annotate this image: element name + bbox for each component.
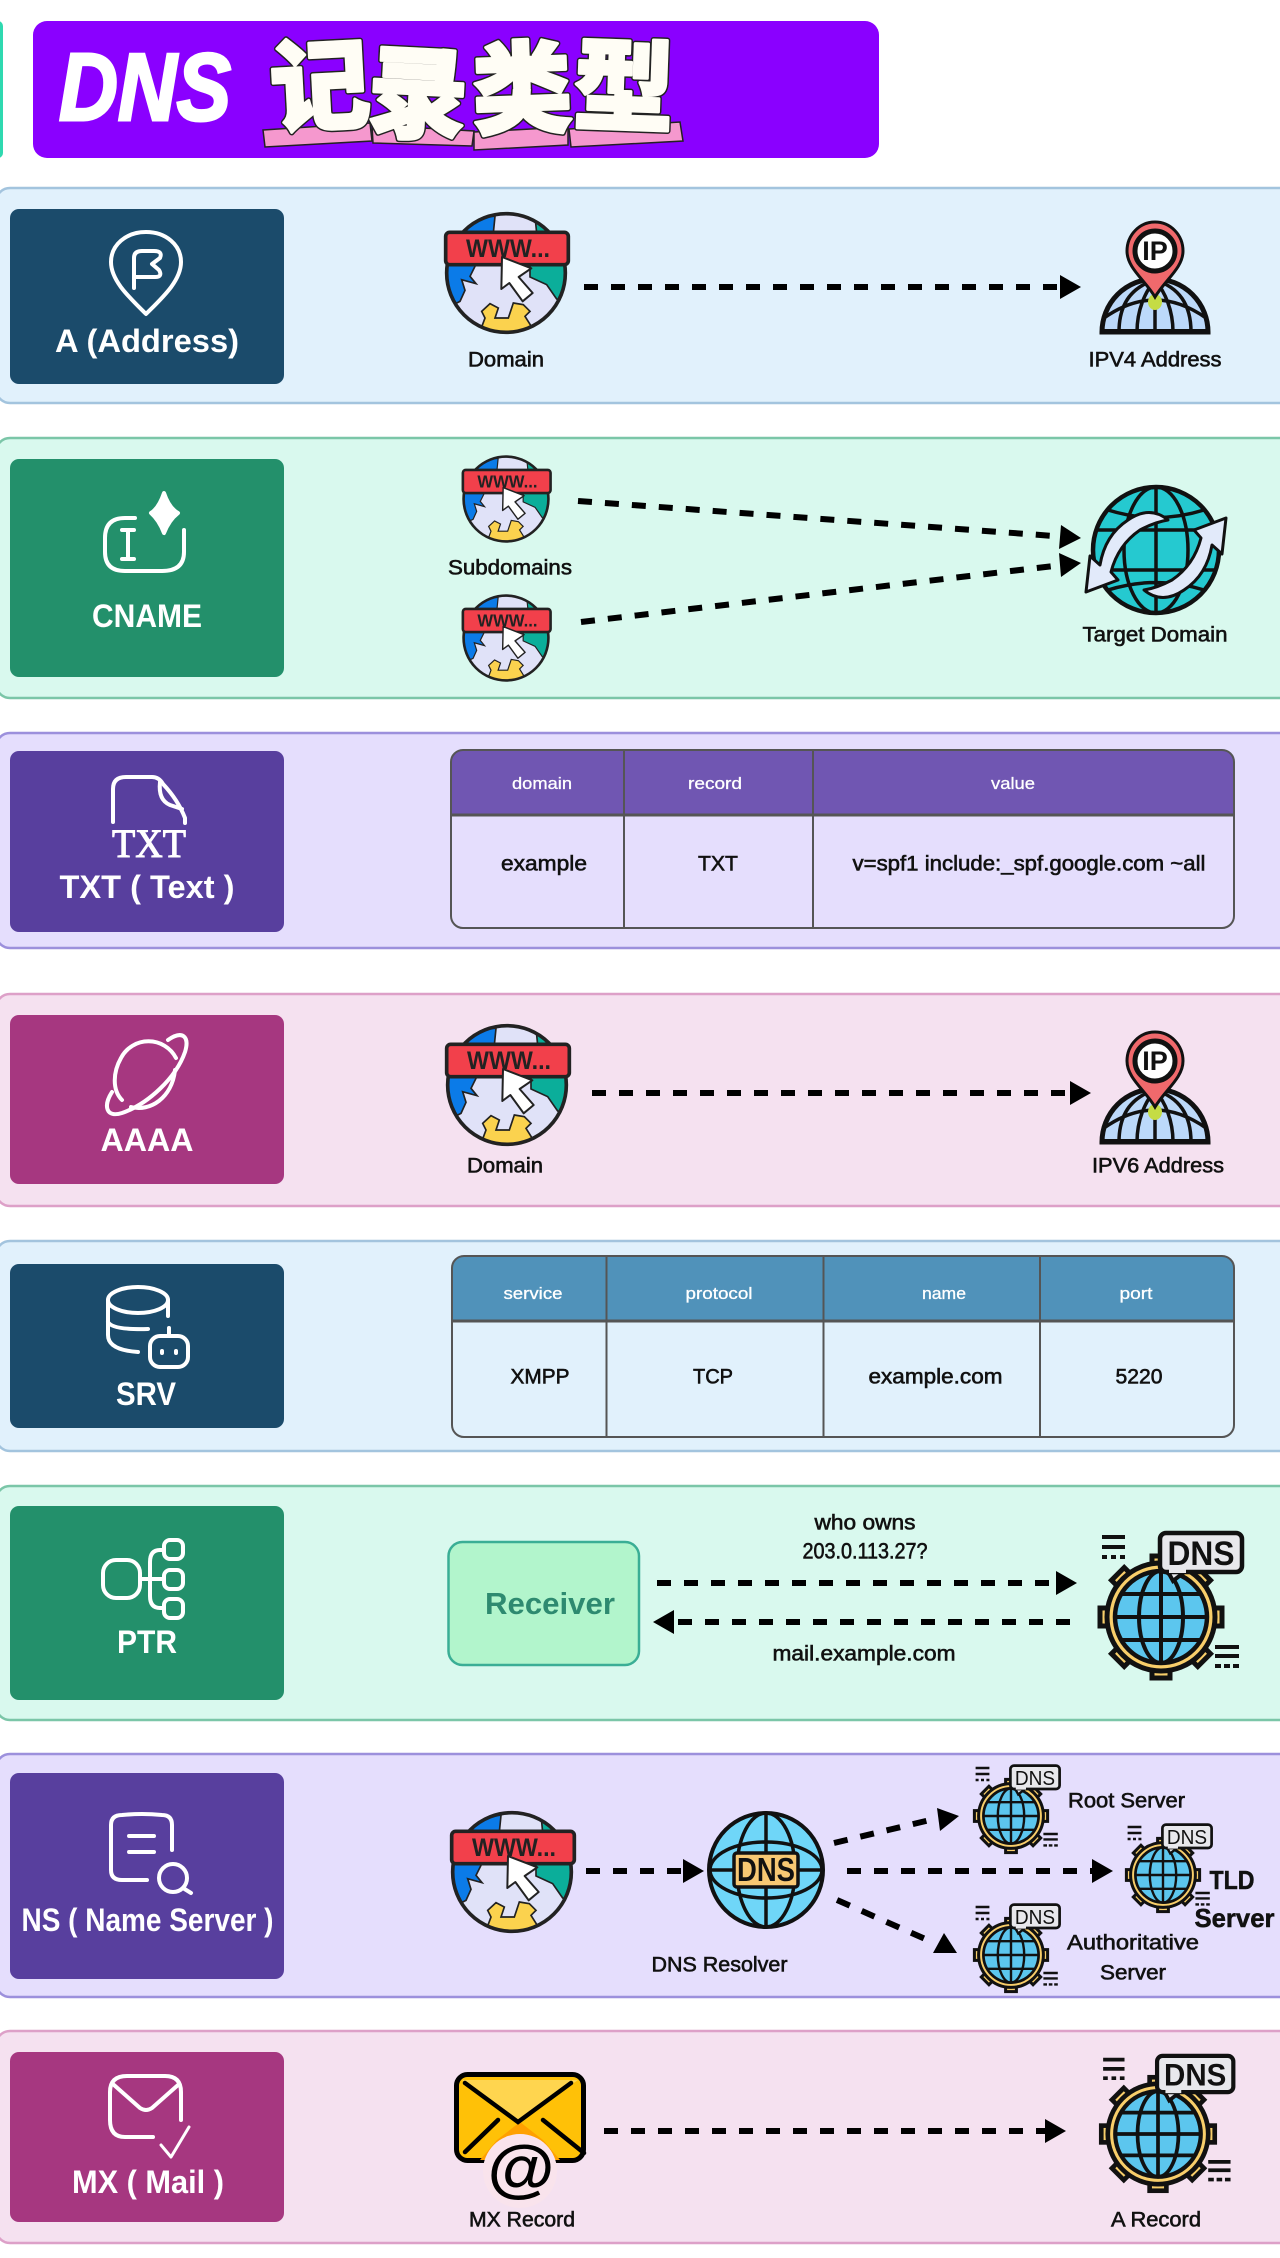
title: 记录类型: 记 [267, 29, 373, 147]
icon: root server: DNS [1015, 1768, 1055, 1790]
table: TXT record: value [991, 774, 1035, 793]
table: SRV record: service [504, 1284, 562, 1303]
table: TXT record: example [501, 852, 587, 875]
arrow: client to resolver [586, 1859, 704, 1883]
icon: subdomain globe 2 [459, 596, 552, 686]
icon: location pin with beta [111, 232, 181, 314]
title: 记录类型: 记 [267, 29, 373, 147]
icon: mail with check [110, 2076, 189, 2157]
text: who owns query [802, 1511, 928, 1564]
icon: subdomain globe 2: WWW... [477, 611, 537, 631]
icon: tree nodes [103, 1540, 183, 1618]
icon: TXT file: TXT [112, 821, 186, 866]
icon: DNS server gear globe [1100, 1533, 1242, 1678]
label: PTR: PTR [117, 1624, 177, 1660]
label: PTR [10, 1506, 284, 1700]
panel: A record [0, 188, 1280, 403]
icon: subdomain globe 1 [459, 457, 552, 547]
icon: IP pin on globe [1100, 222, 1210, 334]
arrow: resolver to authoritative [837, 1900, 957, 1953]
icon: domain globe: WWW... [467, 1047, 551, 1075]
icon: envelope with at sign [456, 2074, 584, 2208]
text: A Record: A Record [1111, 2208, 1201, 2231]
table: SRV record: 5220 [1116, 1365, 1162, 1388]
icon: DNS resolver globe: DNS [737, 1851, 795, 1888]
icon: TLD server [1126, 1825, 1212, 1912]
box: Receiver [448, 1542, 639, 1665]
text: TLD Server: Server [1194, 1903, 1274, 1933]
arrow: MX to A record [604, 2119, 1066, 2143]
panel: AAAA record [0, 994, 1280, 1206]
text: Authoritative Server: Authoritative [1067, 1931, 1199, 1954]
table: TXT record: v=spf1 include:_spf.google.com ~all [852, 852, 1206, 875]
icon: document search [111, 1814, 191, 1893]
title: 记录类型: 型 [572, 31, 676, 147]
icon: planet [107, 1035, 186, 1114]
label: CNAME [10, 459, 284, 677]
text: who owns query: 203.0.113.27? [802, 1539, 928, 1564]
label: MX (Mail): MX ( Mail ) [72, 2164, 224, 2200]
icon: IP pin on globe [1100, 1032, 1210, 1144]
icon: authoritative server: DNS [1015, 1907, 1055, 1929]
arrow: resolver to root [834, 1808, 959, 1843]
icon: IP pin on globe: IP [1142, 236, 1168, 266]
table: TXT record: record [688, 774, 742, 793]
table: TXT record: domain [512, 774, 572, 793]
panel: SRV record [0, 1241, 1280, 1451]
table: SRV record: port [1120, 1284, 1153, 1303]
icon: domain globe: WWW... [466, 235, 550, 263]
title banner [0, 21, 879, 158]
table: SRV record: XMPP [510, 1365, 570, 1388]
icon: TLD server: DNS [1167, 1827, 1207, 1849]
label: A (Address) [10, 209, 284, 384]
icon: client globe [446, 1813, 576, 1939]
text: Domain: Domain [468, 348, 544, 371]
text: Root Server: Root Server [1068, 1789, 1185, 1812]
table: TXT record [451, 750, 1234, 928]
panel: PTR record [0, 1486, 1280, 1720]
label: A (Address): A (Address) [55, 323, 239, 359]
arrow: domain to IPv6 [592, 1081, 1091, 1105]
icon: DNS resolver globe [709, 1813, 823, 1927]
text: Authoritative Server: Server [1100, 1961, 1166, 1984]
table: SRV record: name [922, 1284, 966, 1303]
icon: DNS server gear globe [1101, 2056, 1233, 2191]
label: AAAA: AAAA [100, 1122, 194, 1158]
icon: client globe: WWW... [472, 1834, 556, 1862]
arrow: domain to IPv4 [584, 275, 1081, 299]
arrow: receiver to DNS [657, 1571, 1077, 1595]
label: TXT (Text): TXT ( Text ) [60, 869, 234, 905]
label: MX (Mail) [10, 2052, 284, 2222]
panel: MX record [0, 2031, 1280, 2243]
icon: root server [974, 1766, 1060, 1853]
text: DNS Resolver: DNS Resolver [652, 1953, 788, 1976]
arrow: DNS to receiver [653, 1610, 1070, 1634]
box: Receiver: Receiver [485, 1586, 615, 1621]
panel: TXT record [0, 733, 1280, 948]
title: 记录类型 [267, 29, 676, 155]
label: SRV [10, 1264, 284, 1428]
text: IPV6 Address: IPV6 Address [1092, 1154, 1224, 1177]
text: TLD Server [1194, 1865, 1274, 1933]
icon: domain globe [440, 214, 570, 340]
icon: TXT file [112, 777, 186, 866]
icon: text cursor with sparkle [105, 493, 184, 571]
title: 记录类型: 类 [470, 33, 574, 149]
icon: envelope with at sign: @ [488, 2132, 554, 2204]
icon: database with robot [108, 1287, 188, 1367]
text: who owns query: who owns [813, 1511, 916, 1534]
title: 记录类型: 录 [365, 37, 471, 155]
table: SRV record: TCP [693, 1365, 733, 1388]
label: AAAA [10, 1015, 284, 1184]
label: NS (Name Server): NS ( Name Server ) [22, 1902, 274, 1938]
text: TLD Server: TLD [1210, 1865, 1254, 1895]
arrow: resolver to TLD [847, 1859, 1113, 1883]
text: Target Domain: Target Domain [1082, 623, 1228, 646]
title highlight strips [263, 122, 683, 150]
arrow: subdomain 1 to target [578, 501, 1081, 549]
title: DNS: DNS [59, 34, 231, 141]
label: NS (Name Server) [10, 1773, 284, 1979]
table: SRV record: protocol [686, 1284, 752, 1303]
icon: IP pin on globe: IP [1142, 1046, 1168, 1076]
panel: NS record [0, 1754, 1280, 1997]
arrow: subdomain 2 to target [581, 553, 1081, 622]
icon: DNS server gear globe: DNS [1164, 2057, 1226, 2093]
title: 记录类型: 录 [365, 37, 471, 155]
panel: CNAME record [0, 438, 1280, 698]
label: TXT (Text) [10, 751, 284, 932]
label: SRV: SRV [116, 1376, 177, 1412]
title: 记录类型: 类 [470, 33, 574, 149]
icon: DNS server gear globe: DNS [1168, 1535, 1234, 1573]
icon: domain globe [441, 1026, 571, 1152]
text: Subdomains: Subdomains [448, 556, 572, 579]
icon: authoritative server [974, 1905, 1060, 1992]
icon: subdomain globe 1: WWW... [477, 472, 537, 492]
text: Authoritative Server [1067, 1931, 1199, 1984]
icon: target domain globe with arrows [1086, 487, 1226, 613]
table: SRV record [452, 1256, 1234, 1437]
table: TXT record: TXT [698, 852, 738, 875]
text: MX Record: MX Record [469, 2208, 575, 2231]
label: CNAME: CNAME [92, 598, 202, 634]
text: Domain: Domain [467, 1154, 543, 1177]
text: mail.example.com: mail.example.com [772, 1642, 956, 1665]
text: IPV4 Address: IPV4 Address [1088, 348, 1222, 371]
title: 记录类型: 型 [572, 31, 676, 147]
table: SRV record: example.com [868, 1365, 1002, 1388]
